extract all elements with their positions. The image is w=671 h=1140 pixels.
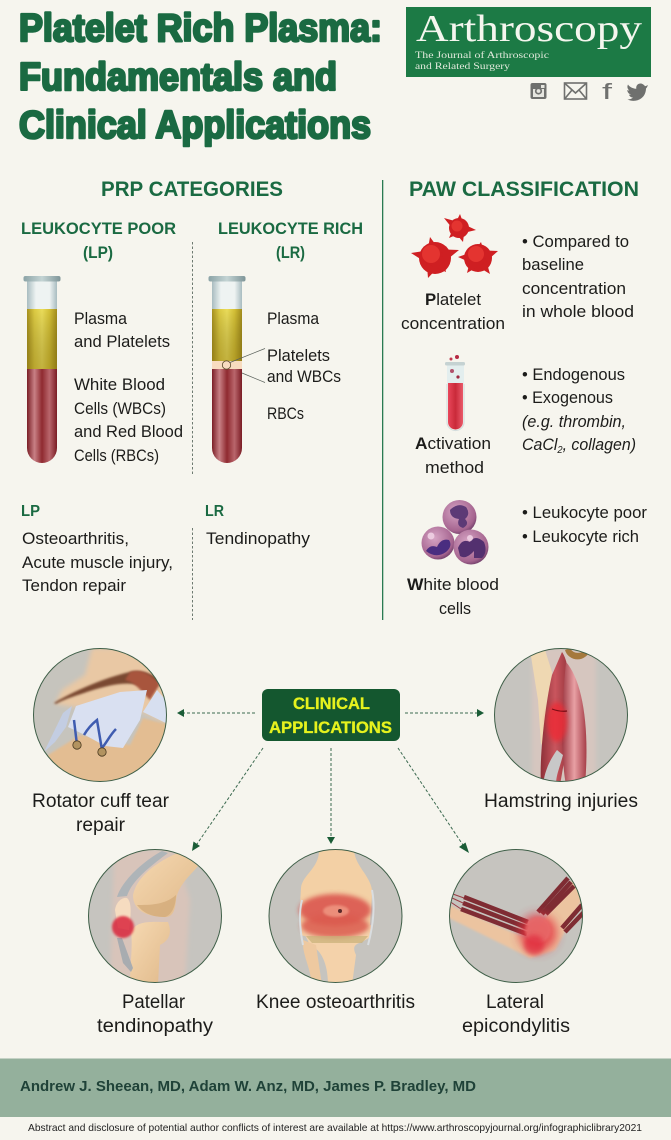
disclosure footnote: Abstract and disclosure of potential author conflicts of interest are available at https://www.arthroscopyjournal.org/infographiclibrary2021	[28, 1122, 642, 1134]
label: rotator cuff tear repair	[32, 791, 170, 836]
divider	[382, 180, 383, 620]
label: hamstring injuries: Hamstring injuries	[484, 791, 638, 812]
subheading: leukocyte poor	[21, 220, 176, 262]
LP indications: LP	[21, 503, 40, 520]
label: lateral epicondylitis: epicondylitis	[462, 1016, 570, 1037]
arrow: to rotator cuff	[177, 709, 255, 717]
arrow: to lateral epicondylitis	[398, 748, 469, 853]
text: white blood cell bullets: • Leukocyte rich	[522, 527, 639, 546]
label: patellar tendinopathy	[97, 992, 214, 1037]
test tube: leukocyte poor	[24, 276, 60, 463]
icon: instagram	[530, 83, 546, 99]
labels: leukocyte rich tube: RBCs	[267, 404, 304, 423]
icon: twitter	[627, 84, 648, 101]
subheading: leukocyte rich: LEUKOCYTE RICH	[218, 220, 363, 238]
title: Platelet Rich Plasma:	[19, 7, 382, 50]
heading: PRP categories: PRP CATEGORIES	[101, 177, 283, 201]
clinical applications box	[262, 689, 400, 741]
label: platelet concentration: concentration	[401, 314, 505, 333]
illustration: rotator cuff	[33, 648, 170, 785]
journal logo: The Journal of Arthroscopic	[415, 50, 549, 61]
clinical applications box: CLINICAL	[293, 695, 370, 713]
title: Clinical Applications	[19, 104, 371, 147]
LP indications: Tendon repair	[22, 576, 126, 595]
icon: activation vial	[445, 355, 465, 430]
arrow: to hamstring	[405, 709, 484, 717]
clinical applications box: APPLICATIONS	[269, 719, 392, 737]
icon: facebook: f	[602, 79, 613, 104]
labels: leukocyte rich tube: and WBCs	[267, 367, 341, 386]
LR indications	[205, 503, 311, 548]
journal logo: and Related Surgery	[415, 62, 510, 72]
labels: leukocyte poor tube: Cells (WBCs)	[74, 399, 166, 418]
label: white blood cells: cells	[439, 599, 471, 618]
text: activation bullets	[522, 365, 636, 456]
subheading: leukocyte poor: LEUKOCYTE POOR	[21, 220, 176, 238]
label: patellar tendinopathy: Patellar	[122, 992, 186, 1013]
label: white blood cells	[407, 575, 499, 618]
labels: leukocyte rich tube: Platelets	[267, 346, 330, 365]
text: activation bullets: , collagen)	[563, 435, 636, 454]
journal logo	[406, 7, 651, 77]
text: activation bullets: • Exogenous	[522, 388, 613, 407]
labels: leukocyte poor tube	[74, 309, 183, 465]
labels: leukocyte poor tube: and Platelets	[74, 332, 170, 351]
labels: leukocyte poor tube: Cells (RBCs)	[74, 446, 159, 465]
illustration: lateral epicondylitis	[449, 849, 590, 983]
labels: leukocyte poor tube: White Blood	[74, 375, 165, 394]
illustration: knee osteoarthritis	[269, 849, 403, 985]
label: rotator cuff tear repair: repair	[76, 815, 126, 836]
LR indications: Tendinopathy	[206, 529, 311, 548]
text: platelet concentration bullets	[522, 232, 634, 321]
illustration: patellar tendinopathy	[88, 849, 222, 985]
authors band: Andrew J. Sheean, MD, Adam W. Anz, MD, James P. Bradley, MD	[20, 1078, 476, 1095]
text: white blood cell bullets	[522, 503, 647, 546]
labels: leukocyte rich tube	[267, 309, 341, 423]
test tube: leukocyte rich	[208, 276, 265, 463]
subheading: leukocyte rich	[218, 220, 363, 262]
text: platelet concentration bullets: • Compared to	[522, 232, 629, 251]
LP indications: Acute muscle injury,	[22, 553, 173, 572]
text: activation bullets: 2	[556, 445, 563, 456]
text: white blood cell bullets: • Leukocyte poor	[522, 503, 647, 522]
text: platelet concentration bullets: concentration	[522, 279, 626, 298]
title	[19, 7, 382, 147]
arrow: to knee osteoarthritis	[327, 748, 335, 844]
text: activation bullets: • Endogenous	[522, 365, 625, 384]
text: activation bullets: CaCl	[522, 435, 560, 454]
subheading: leukocyte rich: (LR)	[276, 244, 305, 262]
icon: platelets	[411, 214, 498, 278]
icon: white blood cells	[422, 500, 488, 564]
label: lateral epicondylitis: Lateral	[486, 992, 544, 1013]
title: Fundamentals and	[19, 56, 337, 99]
labels: leukocyte poor tube: Plasma	[74, 309, 128, 328]
label: activation method	[415, 434, 491, 477]
label: patellar tendinopathy: tendinopathy	[97, 1016, 214, 1037]
text: platelet concentration bullets: baseline	[522, 255, 584, 274]
social icons	[530, 79, 648, 104]
label: knee osteoarthritis: Knee osteoarthritis	[256, 992, 415, 1013]
label: activation method: Activation	[415, 434, 491, 453]
icon: email	[564, 83, 586, 99]
illustration: hamstring	[494, 648, 628, 785]
text: platelet concentration bullets: in whole blood	[522, 302, 634, 321]
text: activation bullets: (e.g. thrombin,	[522, 412, 626, 431]
LP indications	[21, 503, 173, 595]
arrow: to patellar tendinopathy	[192, 748, 263, 851]
authors band	[0, 1058, 671, 1117]
subheading: leukocyte poor: (LP)	[83, 244, 113, 262]
heading: PAW classification: PAW CLASSIFICATION	[409, 177, 639, 201]
label: white blood cells: White blood	[407, 575, 499, 594]
label: lateral epicondylitis	[462, 992, 570, 1037]
label: activation method: method	[425, 458, 484, 477]
label: rotator cuff tear repair: Rotator cuff tear	[32, 791, 170, 812]
labels: leukocyte poor tube: and Red Blood	[74, 422, 183, 441]
LR indications: LR	[205, 503, 224, 520]
label: platelet concentration	[401, 290, 505, 333]
journal logo: Arthroscopy	[416, 8, 642, 50]
label: platelet concentration: Platelet	[425, 290, 481, 309]
LP indications: Osteoarthritis,	[22, 529, 129, 548]
labels: leukocyte rich tube: Plasma	[267, 309, 319, 328]
